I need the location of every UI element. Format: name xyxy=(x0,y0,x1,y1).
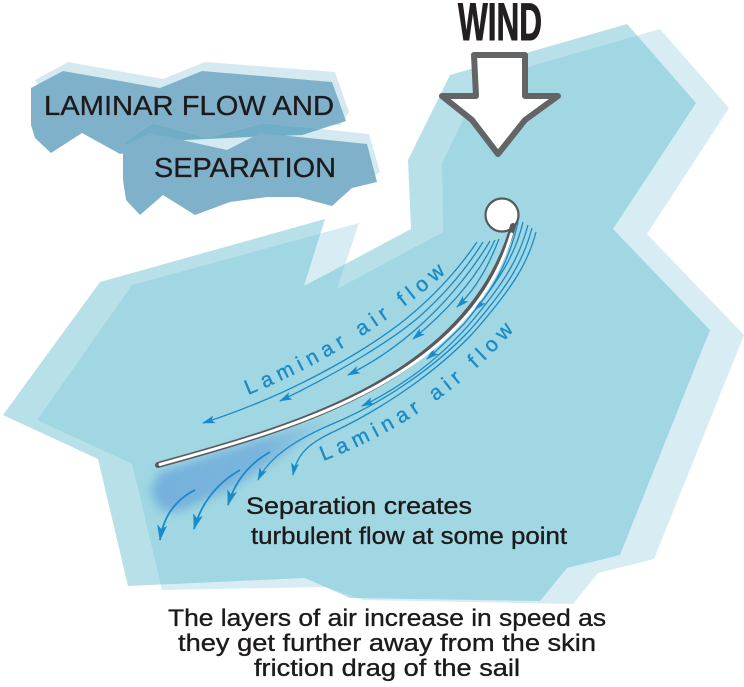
caption xyxy=(168,605,606,682)
callout: separation: Separation creates xyxy=(246,493,472,520)
caption: they get further away from the skin xyxy=(178,630,596,657)
label: upper laminar air flow: Laminar air flow xyxy=(244,264,444,395)
icon: wind arrow xyxy=(442,55,558,154)
title line 1: LAMINAR FLOW AND xyxy=(44,90,334,121)
callout: separation xyxy=(246,493,567,550)
turbulent flow arrows xyxy=(160,452,270,540)
label: lower laminar air flow: Laminar air flow xyxy=(319,322,512,461)
caption: friction drag of the sail xyxy=(254,655,520,682)
title line 2: SEPARATION xyxy=(154,152,336,183)
title banner xyxy=(31,62,380,215)
windward laminar flow lines xyxy=(203,239,499,423)
leeward laminar flow lines xyxy=(258,222,536,480)
turbulence smudge xyxy=(150,414,340,512)
callout: separation: turbulent flow at some point xyxy=(251,523,567,550)
caption: The layers of air increase in speed as xyxy=(168,605,606,632)
sail with luff curl xyxy=(158,198,518,465)
